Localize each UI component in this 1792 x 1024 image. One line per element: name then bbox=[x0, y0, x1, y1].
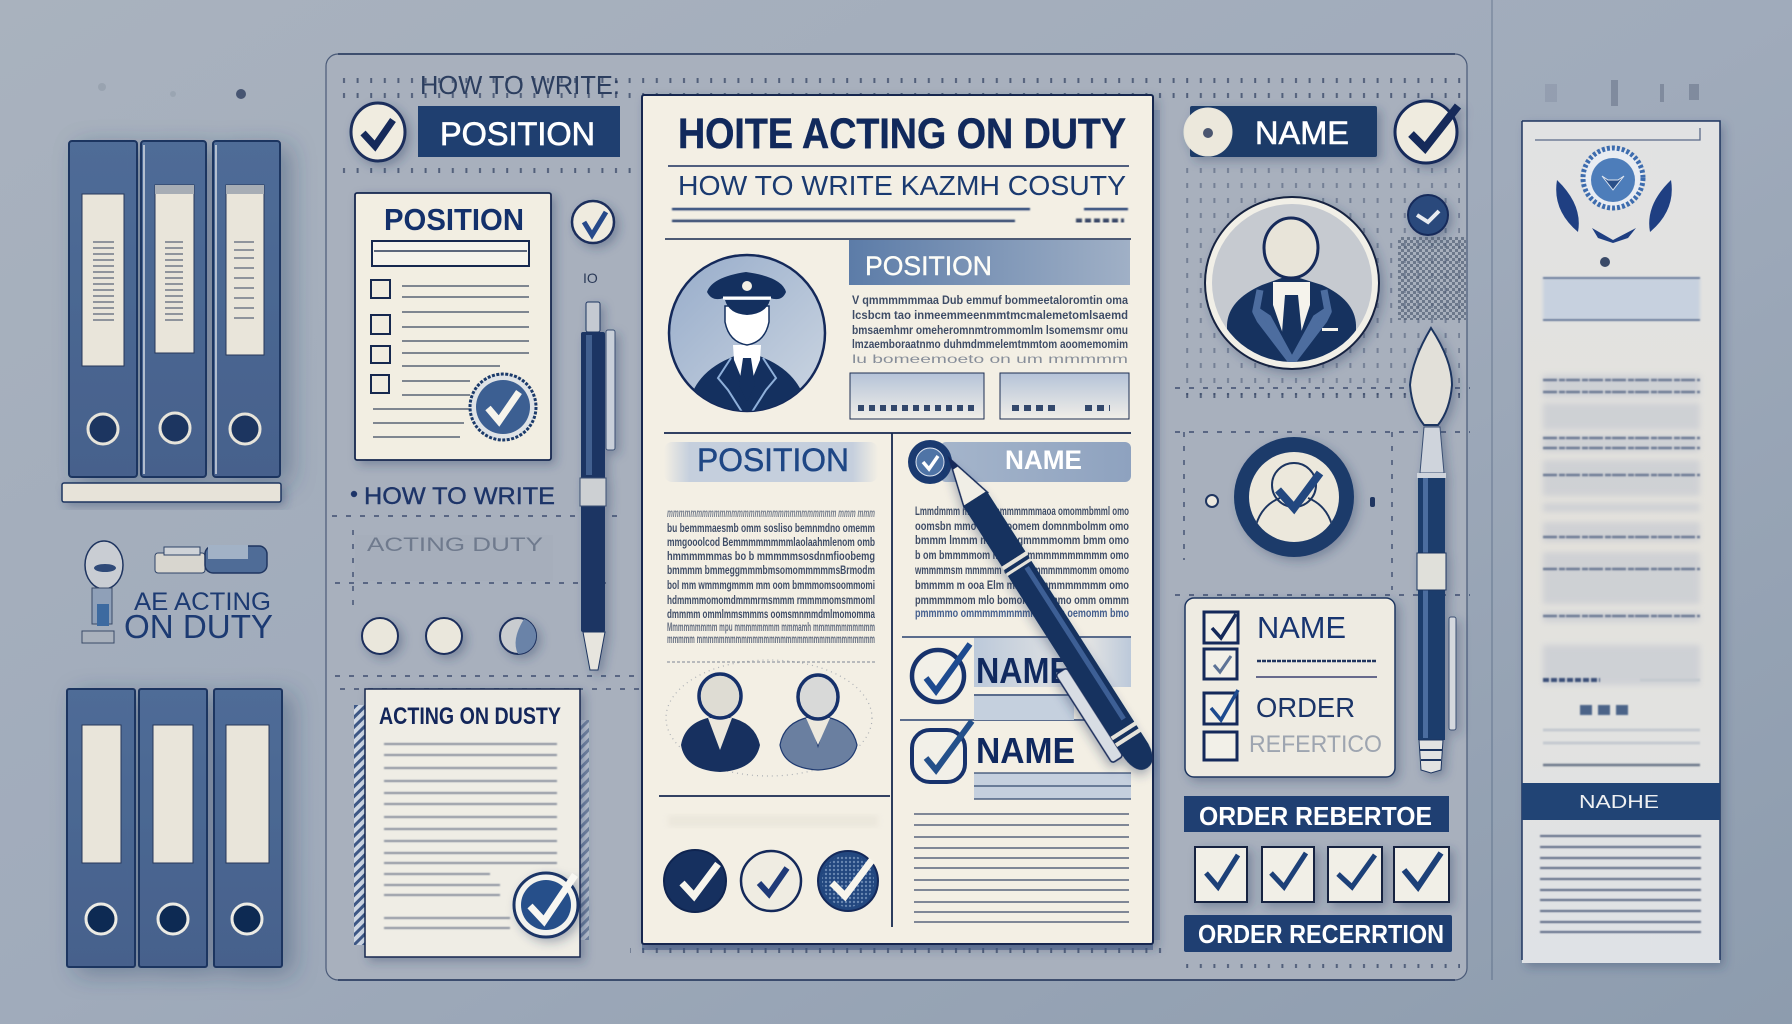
binder 6 bbox=[214, 689, 282, 967]
right divider bbox=[1491, 0, 1493, 980]
name text: NAME bbox=[1257, 610, 1346, 645]
left column text bbox=[667, 497, 875, 662]
officer portrait bbox=[669, 255, 825, 415]
badge 1 bbox=[664, 850, 726, 912]
banner: name: NAME bbox=[1255, 115, 1349, 151]
faded text: REFERTICO bbox=[1249, 731, 1382, 758]
name label: NAME bbox=[976, 650, 1071, 691]
mini card right bbox=[1000, 373, 1129, 419]
box 3 bbox=[1328, 847, 1382, 902]
box 2 bbox=[1262, 847, 1314, 902]
icon: small check circle bbox=[572, 201, 614, 243]
position body text: lu bomeemoeto on um mmmmm bbox=[852, 352, 1128, 366]
name row 2 bbox=[912, 721, 1131, 799]
rule lines bbox=[1257, 660, 1376, 662]
faint text bbox=[668, 815, 878, 827]
icon: navy check on name pill bbox=[908, 440, 952, 484]
card: name order checklist bbox=[1185, 598, 1395, 777]
position body text: bmsaemhmr omeheromnmtrommomlm lsomemsmr omu bbox=[852, 323, 1128, 337]
pill: name: NAME bbox=[1005, 445, 1082, 475]
banner: order 1: ORDER REBERTOE bbox=[1199, 801, 1432, 831]
checkboxes bbox=[1204, 612, 1238, 760]
right column text: bmmmm m ooa Elm mmmmmmmmmmmm omo bbox=[915, 578, 1129, 592]
card: acting on duty bbox=[354, 689, 589, 957]
right column text: pmmmmo ommmmmmmmm mmm oemomm bmo bbox=[915, 606, 1129, 620]
subheading: how to write: HOW TO WRITE bbox=[364, 483, 555, 510]
heading: how to write: HOW TO WRITE: bbox=[420, 70, 620, 100]
title: HOITE ACTING ON DUTY bbox=[678, 110, 1126, 158]
input box bbox=[372, 241, 529, 266]
banner: name bbox=[1184, 106, 1377, 157]
ruled lines bbox=[1540, 836, 1701, 932]
right column text: oomsbn mmo mmm oomem domnmbolmm omo bbox=[915, 519, 1129, 533]
faint marks top left bbox=[98, 83, 246, 99]
band: position bbox=[849, 240, 1130, 285]
stapler icon bbox=[155, 545, 267, 573]
ruled lines bbox=[384, 744, 557, 928]
left column text: hdmmmmomomdmmmrmsmmm rmmmmomsmmoml bbox=[667, 593, 875, 607]
binder 1 bbox=[69, 141, 137, 477]
large pen bbox=[926, 450, 1159, 783]
name label: NAME bbox=[976, 730, 1075, 771]
dotted pattern bbox=[336, 72, 1461, 972]
pill: name bbox=[940, 442, 1131, 482]
ruled lines bbox=[373, 286, 529, 437]
banner: position: POSITION bbox=[440, 116, 595, 152]
left column text: mmmmmmmmmmmmmmmmmmmmmmmmmmmmm mmm mmm bbox=[667, 506, 875, 520]
left column text: dmmmm ommlmmsmmms oomsmnmmdmlmomomma bbox=[667, 607, 875, 621]
shelf bbox=[62, 483, 281, 502]
right column text: b om bmmmmom mmm mmmmmmmmmmm omo bbox=[915, 548, 1129, 562]
position body text: lcsbcm tao inmeemmeenmmtmcmalemetomlsaemd bbox=[852, 308, 1128, 322]
right column text: wmmmmsm mmmmm omm mmmmmmmomm omomo bbox=[914, 563, 1129, 577]
left column text: mmmmm mmmmmmmmmmmmmmmmmmmmmmmmmmmmmmmm bbox=[667, 632, 875, 646]
hatched edge bbox=[354, 705, 589, 945]
order text: ORDER bbox=[1256, 692, 1355, 723]
right column text bbox=[914, 504, 1129, 620]
banner: order 2: ORDER RECERRTION bbox=[1198, 919, 1444, 949]
right document bbox=[1522, 121, 1720, 963]
label: acting on duty bbox=[124, 588, 273, 645]
box 1 bbox=[1195, 847, 1247, 902]
badge 3 bbox=[818, 851, 878, 911]
person 1 bbox=[681, 674, 760, 772]
pill: position bbox=[664, 442, 878, 482]
binder 2 bbox=[141, 141, 206, 477]
faint marks top right bbox=[1545, 80, 1699, 106]
seal check bbox=[470, 374, 536, 440]
dashed guide lines bbox=[332, 388, 1470, 689]
band: name: NADHE bbox=[1579, 792, 1659, 812]
band: name bbox=[1522, 783, 1720, 820]
left column text: Mmmmmmmmm mpu mmmmmmmm mmmamh mmmmmmmmmmm bbox=[667, 620, 875, 634]
binder 3 bbox=[213, 141, 280, 477]
left column text: hmmmmmmas bo b mmmmmsosdnmfioobemg bbox=[667, 549, 875, 563]
check icon bbox=[912, 644, 970, 702]
main panel bbox=[326, 54, 1470, 980]
icon: person check bbox=[1234, 437, 1354, 557]
mini card left bbox=[850, 373, 984, 419]
blurred letter text bbox=[1543, 257, 1700, 765]
icon: check circle bbox=[351, 103, 405, 161]
seal check bbox=[514, 873, 578, 937]
label: acting on duty: AE ACTING bbox=[134, 588, 271, 616]
box 4 bbox=[1394, 847, 1449, 902]
persons bbox=[666, 660, 872, 776]
band: position: POSITION bbox=[865, 251, 992, 281]
check boxes row bbox=[1195, 847, 1449, 902]
binder 5 bbox=[139, 689, 207, 967]
check badges row bbox=[664, 850, 878, 912]
round buttons bbox=[362, 618, 536, 654]
card: position checklist bbox=[355, 193, 551, 460]
card heading: ACTING ON DUSTY bbox=[379, 703, 561, 730]
avatar bbox=[1205, 197, 1379, 369]
right column text: bmmm lmmm mmmm gmmmmomm bmm omo bbox=[915, 533, 1129, 547]
center document bbox=[642, 95, 1153, 944]
icon: small navy check bbox=[1408, 195, 1448, 235]
hatch along center document bbox=[642, 110, 1160, 950]
banner: position bbox=[418, 106, 620, 157]
position body text bbox=[852, 293, 1128, 366]
pill: position: POSITION bbox=[697, 442, 849, 478]
name row 1 bbox=[900, 637, 1131, 720]
check icon bbox=[912, 721, 972, 782]
binders bottom bbox=[67, 689, 282, 967]
stamp icon bbox=[82, 541, 123, 643]
position body text: lmzaemboraatnmo duhmdmmelemtmmtom aoomemomim bbox=[852, 337, 1128, 351]
binder 4 bbox=[67, 689, 135, 967]
left column text: mmgooolcod Bemmmmmmmmlaolaahmlenom omb bbox=[667, 535, 875, 549]
dashed box text bbox=[355, 535, 553, 581]
mini cards bbox=[850, 373, 1129, 419]
faint mark: IO bbox=[583, 270, 598, 286]
right column text: Lmmdmmm mm mmmmmmmmmaoa omommbmml omo bbox=[915, 504, 1129, 518]
dashed box text: ACTING DUTY bbox=[367, 535, 543, 556]
checkboxes bbox=[371, 280, 390, 393]
left column text: bu bemmmaesmb omm sosliso bemnmdno omemm bbox=[667, 521, 875, 535]
left column text: bmmmm bmmeggmmmbmsomommmmmsBrmodm bbox=[667, 563, 875, 577]
binders top bbox=[69, 141, 280, 477]
pen left bbox=[580, 302, 615, 670]
small marks bbox=[1206, 495, 1375, 507]
subtitle: HOW TO WRITE KAZMH COSUTY bbox=[678, 170, 1126, 201]
label: acting on duty: ON DUTY bbox=[124, 608, 273, 645]
brush pen bbox=[1410, 328, 1456, 773]
badge 2 bbox=[741, 851, 801, 911]
card heading: POSITION bbox=[384, 202, 524, 237]
emblem bbox=[1556, 148, 1672, 243]
ruled lines lower right bbox=[914, 814, 1129, 922]
header rule lines bbox=[672, 209, 1128, 221]
left column text: bol mm wmmmgmmm mm oom bmmmomsoommomi bbox=[667, 578, 875, 592]
right column text: pmmmmmom mlo bomomm mmmo omm ommm bbox=[915, 593, 1129, 607]
person 2 bbox=[780, 675, 857, 770]
halftone patch bbox=[1398, 237, 1466, 320]
position body text: V qmmmmmmaa Dub emmuf bommeetaloromtin oma bbox=[852, 293, 1128, 307]
icon: large check circle bbox=[1395, 101, 1458, 163]
